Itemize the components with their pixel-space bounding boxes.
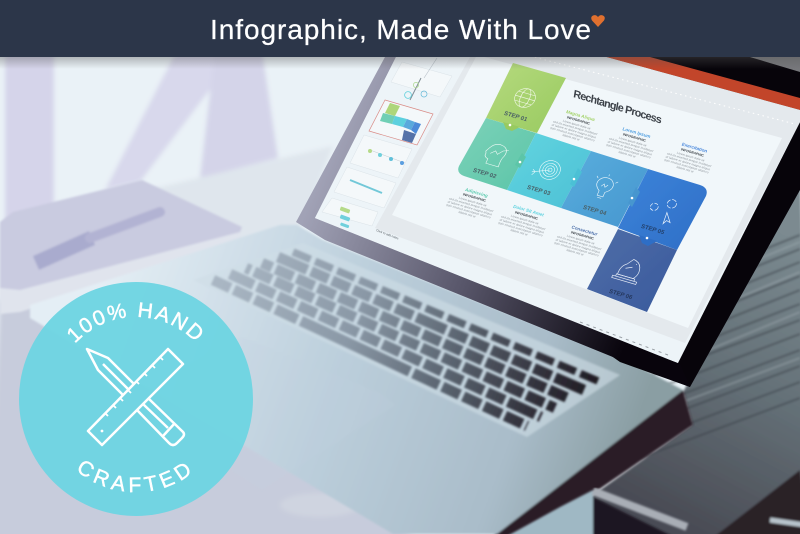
badge circle [19,282,253,516]
text block: Lorem Ipsum: INFOGRAPHIC [622,132,647,143]
step labels: STEP 05 [640,224,666,236]
wooden table, right side [530,180,800,534]
presentation app on laptop screen [315,55,800,363]
text block: Dolor Sit Amet [496,202,552,241]
step 01 card [486,63,566,133]
text block: Adipiscing: Lorem ipsum dolor sit [458,196,487,208]
slide title: Rechtangle Process [573,88,663,127]
text block: Adipiscing: Adipiscing [464,187,489,198]
text block: Lorem Ipsum: laboris nisi ut [618,150,636,159]
icon: crossed ruler and pencil [87,349,184,445]
text block: Magna Aliqua: quis nostrud exercitation ullamco [550,126,596,142]
text block: Magna Aliqua: INFOGRAPHIC [566,115,591,126]
text block: Consectetur: laboris nisi ut [566,248,584,257]
text block: Adipiscing: quis nostrud exercitation ullamco [446,203,492,219]
bars thumbnail [350,180,382,193]
text block: Adipiscing: sed do eiusmod tempor incididunt [448,197,494,213]
text block: Consectetur: quis nostrud exercitation ullamco [554,241,600,257]
step 06 card [587,229,677,312]
connector tabs [503,122,657,246]
ruler dots [530,56,795,124]
text block: Adipiscing: laboris nisi ut [458,210,476,219]
step 02 card [458,118,536,190]
shadow under header [0,57,800,69]
workspace [375,57,800,343]
text block: Magna Aliqua [548,107,604,146]
text block: Dolor Sit Amet: Dolor Sit Amet [512,204,545,217]
laptop foreground object, bottom edge [500,490,687,534]
text block: Exercitation: ut labore et dolore magna aliqua [665,155,711,171]
text block: Dolor Sit Amet: INFOGRAPHIC [514,210,539,221]
step labels: STEP 02 [472,168,498,180]
thumbnail sidebar [322,58,452,228]
text block: Lorem Ipsum: Lorem ipsum dolor sit [618,136,647,148]
icon: light bulb [589,171,620,201]
badge: 100% hand crafted [19,282,253,516]
keyboard keys [213,252,598,426]
text block: Lorem Ipsum: sed do eiusmod tempor incididunt [608,137,654,153]
step 03 card [507,133,591,208]
step labels: STEP 06 [608,289,634,301]
icon: head [481,142,510,168]
step labels [472,111,666,301]
text block: Dolor Sit Amet: sed do eiusmod tempor incididunt [500,215,546,231]
pencil [87,349,184,445]
title bar, red [606,57,800,110]
text block: Magna Aliqua: sed do eiusmod tempor incididunt [552,120,598,136]
icon: chess knight [612,256,645,284]
text block: Consectetur: INFOGRAPHIC [570,230,595,241]
ruler [88,349,183,445]
text block: Adipiscing: ut labore et dolore magna aliqua [447,200,493,216]
text block: Consectetur: sed do eiusmod tempor incididunt [556,235,602,251]
text block: Exercitation: Lorem ipsum dolor sit [676,151,705,163]
text block: Magna Aliqua: laboris nisi ut [562,133,580,142]
icon: globe [511,86,539,110]
icon: arrows [645,195,679,225]
text block: Consectetur: ut labore et dolore magna aliqua [555,238,601,254]
list thumbnail [340,206,350,228]
text block: Consectetur: Lorem ipsum dolor sit [566,234,595,246]
text block: Magna Aliqua: Lorem ipsum dolor sit [562,119,591,131]
text block: Lorem Ipsum: Lorem Ipsum [622,126,651,139]
text block: Lorem Ipsum [604,124,660,163]
badge text bottom: CRAFTED [78,461,190,492]
step 04 card [561,151,648,227]
text block: Dolor Sit Amet: quis nostrud exercitation ullamco [498,221,544,237]
text block: Magna Aliqua: Magna Aliqua [565,109,596,122]
text block: Magna Aliqua: ut labore et dolore magna aliqua [551,123,597,139]
step 05 card [618,169,707,250]
text block: Consectetur [552,222,608,261]
step labels: STEP 04 [582,205,608,217]
header bar [0,0,800,57]
text block: Exercitation: sed do eiusmod tempor incididunt [666,152,712,168]
step labels: STEP 01 [503,111,529,123]
process thumbnail [368,149,405,165]
text block: Dolor Sit Amet: ut labore et dolore magna aliqua [499,218,545,234]
badge text top: 100% HAND [68,302,202,343]
text block: Lorem Ipsum: ut labore et dolore magna aliqua [607,140,653,156]
screen panel [315,57,800,363]
selected thumbnail [369,100,433,145]
text block: Dolor Sit Amet: laboris nisi ut [510,228,528,237]
step labels: STEP 03 [526,185,552,197]
text block: Exercitation [662,139,718,178]
title: Infographic, Made With Love [210,14,591,45]
icon: target [531,157,564,182]
text block: Adipiscing [444,184,500,223]
slide [392,55,782,328]
status bar note: Click to add notes [376,228,400,241]
text block: Lorem Ipsum: quis nostrud exercitation ullamco [606,143,652,159]
laptop base [30,225,693,534]
icon: heart [591,15,605,27]
notebook with pen [0,180,242,314]
text block: Consectetur: Consectetur [571,225,599,237]
text block: Adipiscing: INFOGRAPHIC [462,192,487,203]
text block: Exercitation: Exercitation [681,142,708,154]
status bar icons [580,322,668,355]
text block: Exercitation: quis nostrud exercitation ullamco [664,158,710,174]
laptop lid and bezel [296,57,800,387]
text block: Exercitation: laboris nisi ut [676,165,694,174]
text block: Exercitation: INFOGRAPHIC [680,147,705,158]
text block: Dolor Sit Amet: Lorem ipsum dolor sit [510,214,539,226]
